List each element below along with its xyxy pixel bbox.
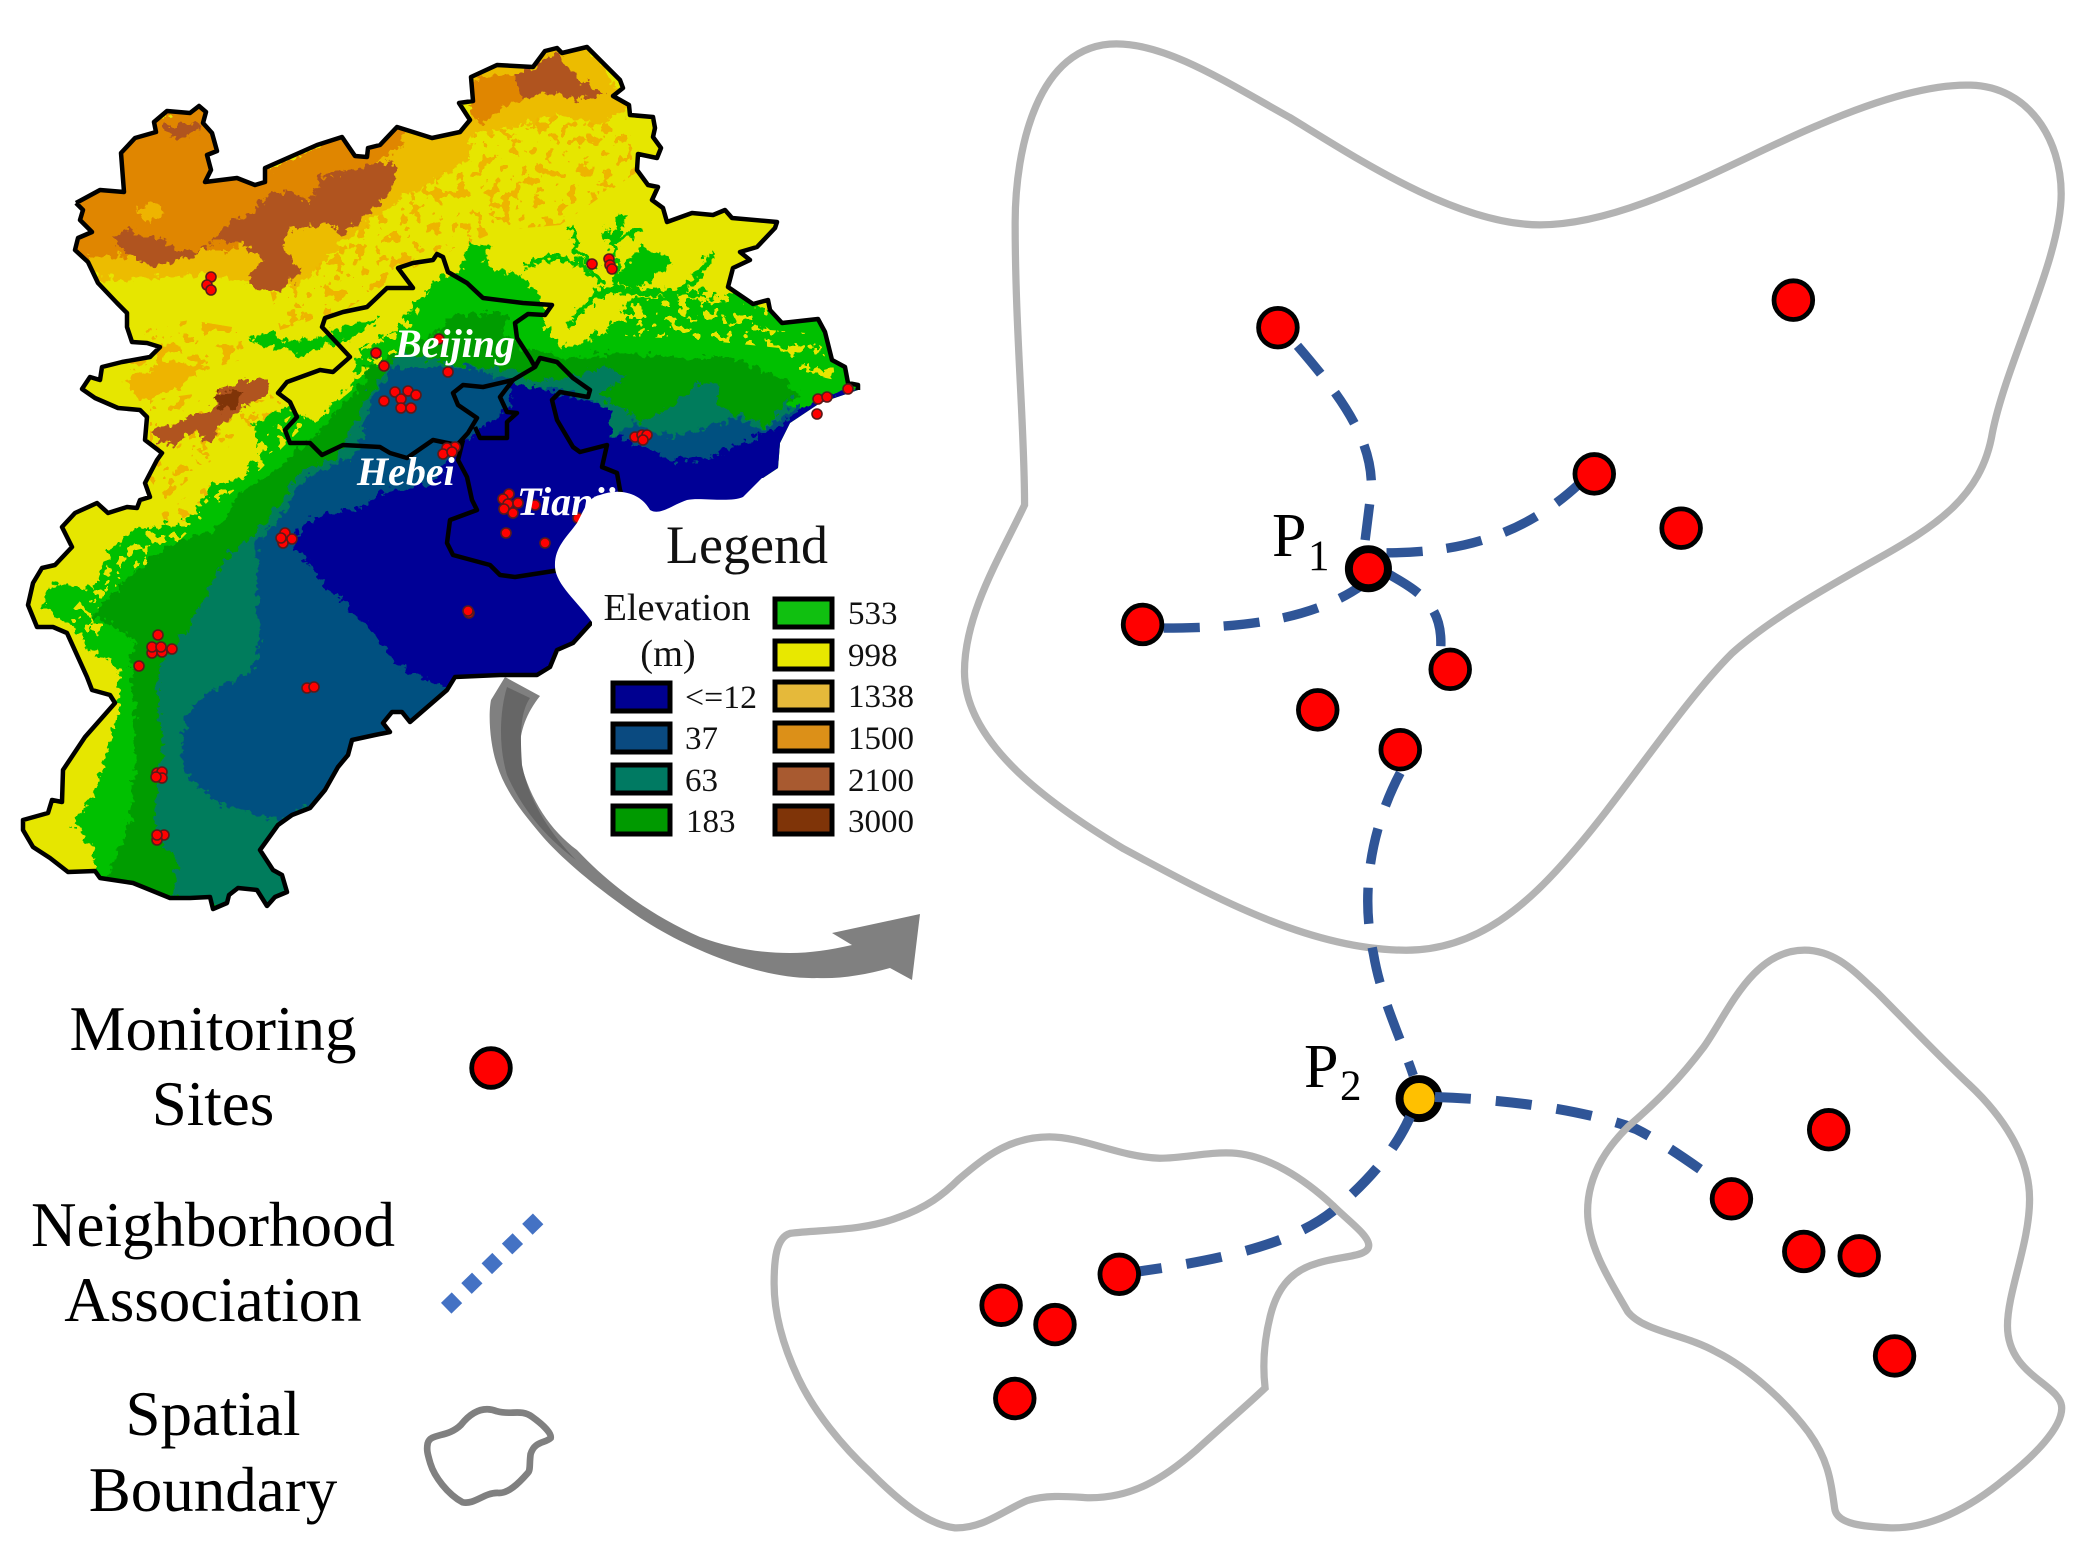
label P1: P	[1272, 502, 1306, 570]
key label: spatial boundary: Boundary	[89, 1455, 338, 1525]
spatial boundary: lower-left region	[774, 1137, 1369, 1528]
yellow flecks in green band	[45, 290, 835, 660]
label P2: 2	[1340, 1063, 1362, 1110]
panel: lower-left spatial region	[774, 1137, 1369, 1528]
legend values	[685, 596, 914, 840]
green tendrils	[525, 215, 720, 327]
elevation legend	[603, 515, 914, 840]
map outline	[23, 47, 858, 909]
key icon: boundary shape	[427, 1409, 551, 1503]
key label: neighborhood association: Association	[64, 1265, 362, 1335]
spatial boundary: large region	[964, 44, 2061, 950]
legend values: 2100	[848, 763, 914, 799]
key label: neighborhood association: Neighborhood	[31, 1190, 395, 1260]
map labels: province names	[356, 321, 638, 524]
legend values: <=12	[685, 680, 757, 716]
legend values: 533	[848, 596, 898, 632]
point P1	[1349, 549, 1388, 588]
legend values: 63	[685, 763, 718, 799]
point P2	[1400, 1079, 1439, 1118]
legend values: 37	[685, 721, 718, 757]
legend values: 3000	[848, 804, 914, 840]
legend values: 1338	[848, 679, 914, 715]
neighborhood links from P2 to lower regions	[1135, 1097, 1704, 1272]
panel: large spatial region with P1	[964, 44, 2061, 1118]
arrow from map to schematic	[490, 677, 920, 980]
monitoring sites on the map	[134, 254, 853, 845]
key icon: monitoring site	[472, 1049, 510, 1087]
key icon: dashed link	[446, 1219, 538, 1308]
legend title: Legend	[666, 515, 828, 575]
legend subtitle: unit: (m)	[640, 633, 696, 675]
province boundaries	[278, 254, 625, 577]
terrain elevation bands	[24, 50, 858, 906]
label P2: P	[1304, 1033, 1338, 1101]
legend values: 1500	[848, 721, 914, 757]
monitoring sites in lower-right region	[1712, 1110, 1914, 1375]
monitoring sites in lower-left region	[982, 1255, 1139, 1418]
key label: monitoring sites: Monitoring	[69, 994, 357, 1064]
legend subtitle: elevation: Elevation	[603, 587, 751, 629]
legend values: 183	[686, 804, 736, 840]
symbol key	[31, 994, 551, 1525]
legend swatches	[613, 599, 832, 834]
legend values: 998	[848, 638, 898, 674]
white legend backdrop	[555, 478, 900, 800]
label: Tianjin: Tianjin	[517, 479, 638, 524]
label: Hebei: Hebei	[356, 449, 455, 494]
label P1: 1	[1308, 533, 1330, 580]
elevation map of Beijing, Tianjin and Hebei	[20, 44, 860, 912]
monitoring sites in large region	[1123, 281, 1813, 769]
key label: monitoring sites: Sites	[152, 1069, 274, 1139]
key label: spatial boundary: Spatial	[126, 1379, 300, 1449]
label: Beijing: Beijing	[394, 321, 515, 366]
spatial boundary: lower-right region	[1588, 950, 2062, 1528]
panel: lower-right spatial region	[1588, 950, 2062, 1528]
neighborhood links around P1 and to P2	[1164, 346, 1580, 1075]
